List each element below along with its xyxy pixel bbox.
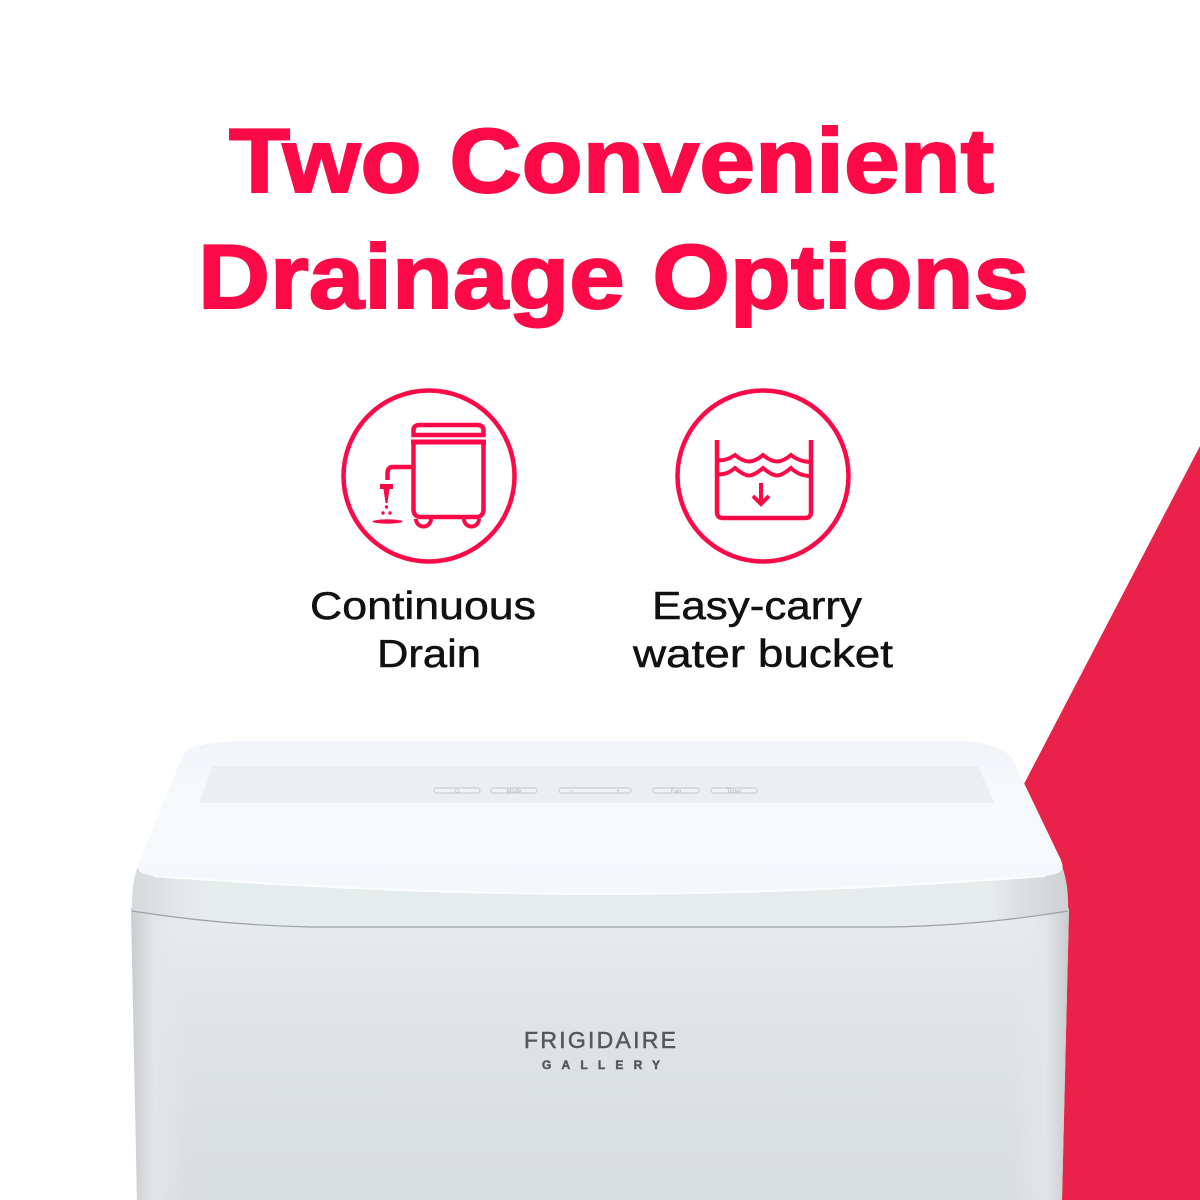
product: dehumidifier: Timer bbox=[726, 789, 742, 795]
label: continuous drain bbox=[310, 585, 536, 676]
lid edge highlight bbox=[153, 876, 1045, 894]
red triangle background bbox=[1000, 446, 1200, 1200]
brand logo: FRIGIDAIRE bbox=[524, 1027, 676, 1053]
lid top bbox=[138, 741, 1063, 893]
lid band bbox=[132, 866, 1068, 927]
control panel bbox=[199, 766, 994, 803]
product: dehumidifier: ⏻ bbox=[455, 788, 460, 795]
product: dehumidifier bbox=[131, 741, 1069, 1200]
product: dehumidifier: + bbox=[616, 789, 620, 795]
product: dehumidifier: Fan bbox=[671, 789, 681, 795]
icon: water bucket bbox=[678, 390, 848, 562]
title bbox=[198, 111, 1029, 328]
device body bbox=[131, 908, 1069, 1200]
label: continuous drain: Drain bbox=[377, 633, 481, 676]
title: Drainage Options bbox=[198, 227, 1029, 328]
product: dehumidifier: Mode bbox=[506, 789, 522, 795]
label: continuous drain: Continuous bbox=[310, 585, 536, 628]
title: Two Convenient bbox=[229, 111, 994, 212]
control buttons bbox=[434, 788, 757, 793]
product: dehumidifier: − bbox=[569, 789, 573, 795]
label: easy-carry water bucket: Easy-carry bbox=[652, 585, 863, 628]
brand logo bbox=[524, 1027, 676, 1072]
label: easy-carry water bucket bbox=[632, 585, 893, 676]
brand logo: GALLERY bbox=[542, 1058, 660, 1072]
icon: continuous drain bbox=[344, 390, 514, 562]
label: easy-carry water bucket: water bucket bbox=[632, 633, 893, 676]
